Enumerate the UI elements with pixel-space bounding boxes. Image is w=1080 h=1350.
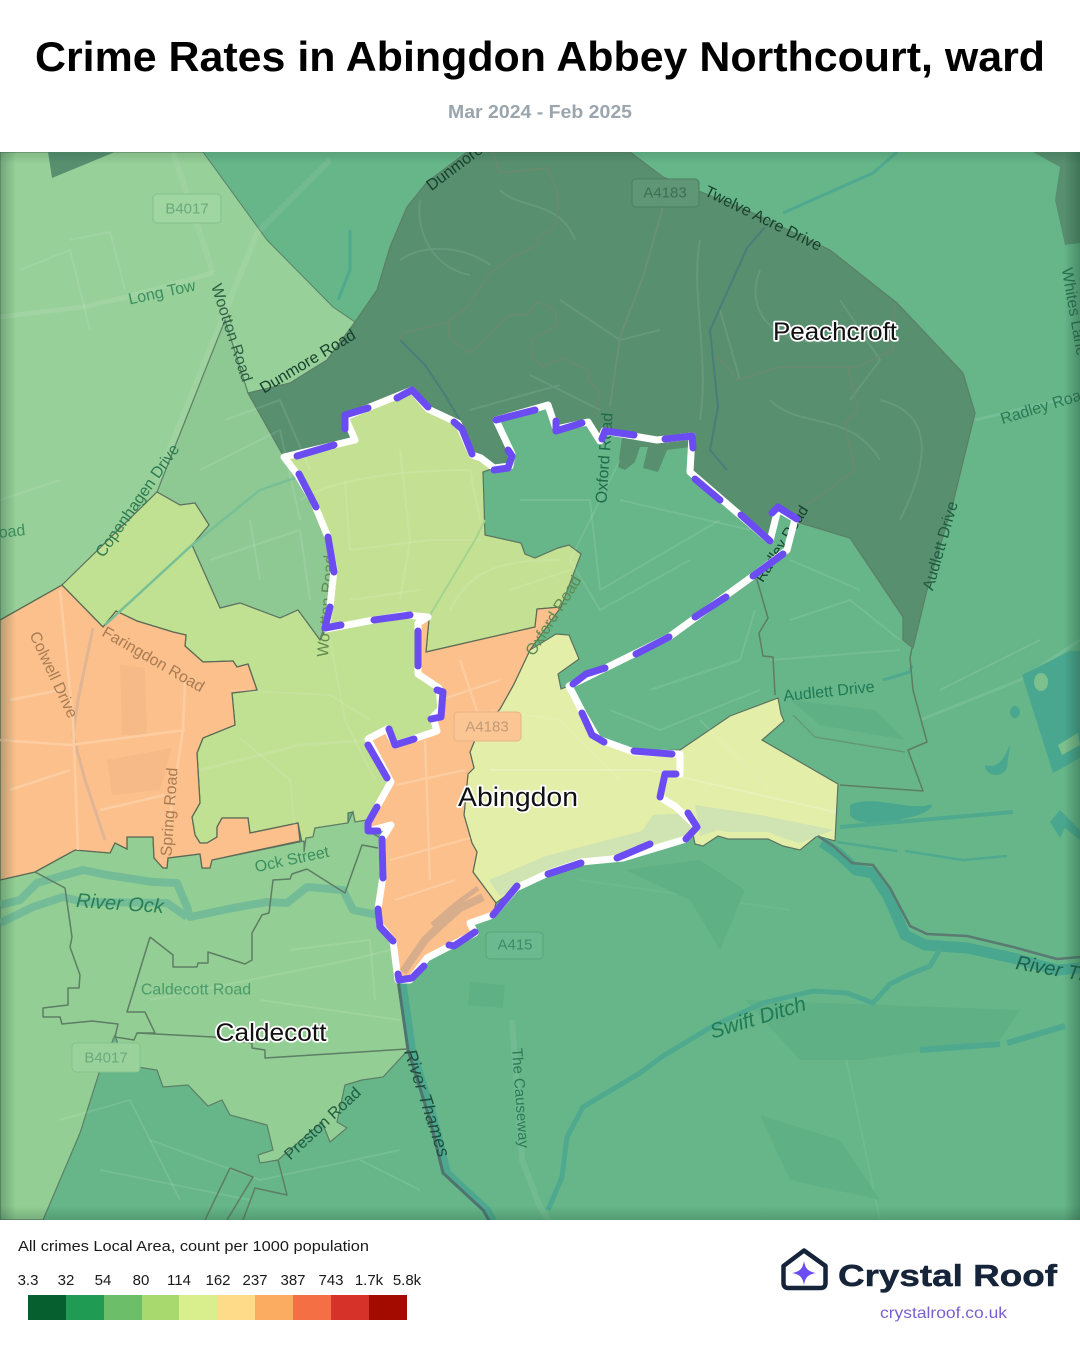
legend values — [18, 1272, 422, 1289]
road shield: A4183 top — [632, 179, 699, 207]
logo: Crystal Roof — [784, 1250, 1058, 1322]
logo url: crystalroof.co.uk — [880, 1305, 1008, 1322]
area: dark top-left corner — [48, 152, 115, 178]
ward area: yellow east — [464, 634, 838, 903]
road label: Ock Street: Ock Street — [253, 844, 331, 876]
road label: Wootton Road: Wootton Road — [207, 282, 255, 384]
legend values: 54 — [95, 1272, 111, 1289]
road label: Dunmore Road north: Dunmore Road — [424, 116, 520, 194]
legend values: 743 — [318, 1272, 344, 1289]
water label: River Ock: River Ock — [75, 890, 166, 918]
water label: Swift Ditch: Swift Ditch — [707, 993, 809, 1043]
place label: Abingdon: Abingdon — [458, 782, 578, 812]
area: north-west light green — [0, 152, 355, 640]
road label: Copenhagen Drive: Copenhagen Drive — [93, 441, 183, 561]
road shield: A4183 centre — [454, 712, 521, 741]
ward area: north lime — [284, 390, 581, 652]
area: west orange — [0, 585, 300, 880]
map edge vignette — [0, 152, 1080, 1220]
road label: Dunmore Road west: Dunmore Road — [257, 327, 359, 397]
ward outline: white base — [284, 390, 795, 980]
legend values: 162 — [205, 1272, 231, 1289]
area: dark north (Peachcroft) — [248, 152, 975, 648]
ward area: orange centre — [368, 607, 561, 980]
detail: pale river strip in yellow ward — [489, 805, 834, 896]
road label: Wootton Road south: Wootton Road — [315, 555, 339, 657]
road label: Long Tow: Long Tow — [127, 278, 198, 308]
detail: orange west patches and railway — [0, 590, 185, 850]
water: River Thames — [398, 836, 1080, 1225]
legend values: 237 — [242, 1272, 268, 1289]
area: south light green (Caldecott) — [0, 812, 408, 1220]
legend values: 5.8k — [393, 1272, 422, 1289]
road shield: A415: A415 — [497, 936, 533, 954]
detail: orange centre streets and brown strip — [390, 660, 500, 972]
road label: Oxford Road north: Oxford Road — [593, 412, 617, 504]
road shield: B4017 top: B4017 — [165, 200, 209, 218]
place label: Caldecott: Caldecott — [216, 1019, 327, 1047]
road label: Colwell Drive: Colwell Drive — [26, 629, 80, 721]
road label: Audlett Drive north: Audlett Drive — [920, 500, 962, 592]
north paths and A4183 line — [400, 153, 895, 505]
water: Swift Ditch and streams — [105, 152, 1065, 1210]
road label: Preston Road: Preston Road — [281, 1084, 365, 1164]
area: west lime — [62, 492, 441, 852]
road network — [0, 152, 1080, 1222]
road label: Twelve Acre Drive: Twelve Acre Drive — [702, 183, 824, 255]
legend values: 80 — [133, 1272, 149, 1289]
subtitle: date range: Mar 2024 - Feb 2025 — [448, 102, 632, 122]
road label: Caldecott Road: Caldecott Road — [141, 982, 251, 998]
legend values: 1.7k — [355, 1272, 384, 1289]
road shield: A4183 centre: A4183 — [465, 718, 509, 736]
water label: River Thames: River Thames — [400, 1047, 454, 1159]
road label: Audlett Drive south: Audlett Drive — [783, 679, 876, 705]
water: River Ock — [0, 870, 378, 923]
road label: Oxford Road south: Oxford Road — [523, 573, 585, 659]
legend values: 114 — [167, 1272, 191, 1289]
logo wordmark: Crystal Roof — [838, 1258, 1058, 1293]
icon: house with star — [784, 1250, 826, 1288]
darker field patches — [674, 892, 876, 1199]
legend — [18, 1238, 422, 1320]
road label: The Causeway: The Causeway — [508, 1047, 532, 1149]
place labels with halo — [216, 318, 897, 1047]
road shield: B4017 bottom: B4017 — [84, 1050, 128, 1066]
area: dark top-right corner — [1033, 152, 1080, 245]
legend values: 3.3 — [18, 1272, 38, 1289]
legend values: 387 — [280, 1272, 306, 1289]
legend title: All crimes Local Area, count per 1000 population — [18, 1238, 369, 1255]
road label: Spring Road: Spring Road — [158, 767, 182, 857]
legend colour scale — [28, 1295, 407, 1320]
road label: Faringdon Road: Faringdon Road — [99, 624, 207, 696]
road label: Radley Road: Radley Road — [752, 503, 812, 585]
lake inner green patches — [1034, 673, 1080, 755]
road shield: A415 — [486, 932, 543, 959]
place label: Peachcroft: Peachcroft — [773, 318, 897, 346]
road shield: B4017 top — [153, 194, 221, 223]
ward outline: purple dashes — [297, 390, 797, 980]
road shield: A4183 top: A4183 — [643, 184, 687, 202]
area: dark blob by Oxford Road — [618, 437, 690, 472]
legend values: 32 — [58, 1272, 74, 1289]
title: Crime Rates in Abingdon Abbey Northcourt, ward — [35, 33, 1045, 80]
thin ward boundaries: south and east — [35, 576, 927, 1220]
map labels — [0, 116, 1080, 1164]
area: wootton middle green — [157, 320, 334, 640]
road shield: B4017 bottom — [72, 1043, 140, 1072]
water: lakes on east side — [850, 651, 1080, 840]
